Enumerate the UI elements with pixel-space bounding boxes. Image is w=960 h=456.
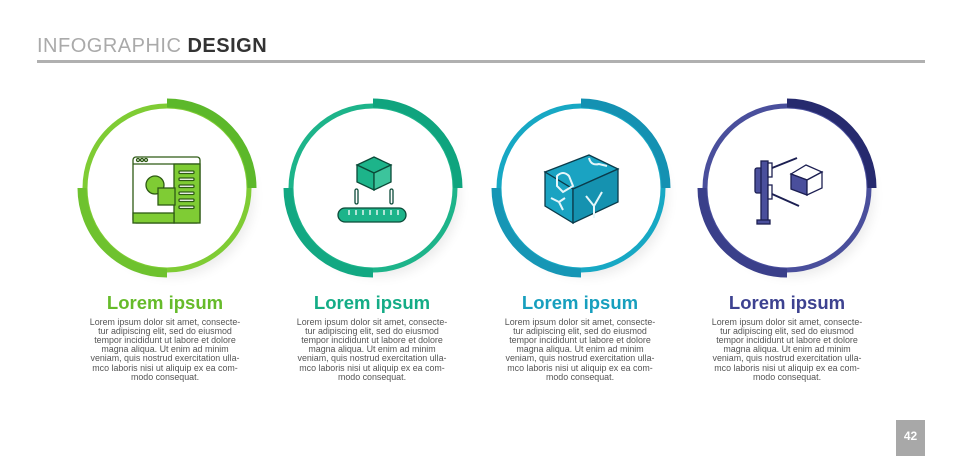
text block: step 2: modo consequat. [338,372,406,382]
text block: step 4: Lorem ipsum dolor sit amet, consecte- [712,317,862,327]
text block: step 1: Lorem ipsum dolor sit amet, consecte- [90,317,240,327]
text block: step 4: veniam, quis nostrud exercitation ulla- [713,353,862,363]
text block: step 4: tur adipiscing elit, sed do eiusmod [720,326,854,336]
text block: step 4: tempor incididunt ut labore et dolore [716,335,858,345]
text block: step 2: Lorem ipsum [314,292,430,313]
ring [496,103,666,273]
text block: step 2: tur adipiscing elit, sed do eiusmod [305,326,439,336]
icon: box over ruler [338,157,406,222]
page number: 42 [904,429,917,443]
text block: step 3: magna aliqua. Ut enim ad minim [516,344,644,354]
title: INFOGRAPHIC DESIGN [37,35,267,57]
text block: step 3: modo consequat. [546,372,614,382]
text block: step 3: mco laboris nisi ut aliquip ex ea com- [507,363,653,373]
text block: step 3: tempor incididunt ut labore et dolore [509,335,651,345]
page number [896,420,925,456]
text block: step 1: tur adipiscing elit, sed do eiusmod [98,326,232,336]
icon: browser window [133,157,200,223]
icon: scanner and box [755,158,822,224]
title [37,35,925,63]
text block: step 2 [297,292,447,382]
text block: step 3: tur adipiscing elit, sed do eiusmod [513,326,647,336]
panel: step 2 [288,103,459,276]
text block: step 1: Lorem ipsum [107,292,223,313]
text block: step 1: magna aliqua. Ut enim ad minim [101,344,229,354]
panel: step 3 [496,103,667,276]
text block: step 1: tempor incididunt ut labore et dolore [94,335,236,345]
panel: step 1 [82,103,253,276]
ring [702,103,872,273]
ring [82,103,252,273]
text block: step 1: veniam, quis nostrud exercitation ulla- [91,353,240,363]
text block: step 3 [505,292,655,382]
icon: cracked cube [545,155,618,223]
text block: step 2: Lorem ipsum dolor sit amet, consecte- [297,317,447,327]
text block: step 4 [712,292,862,382]
text block: step 3: veniam, quis nostrud exercitation ulla- [506,353,655,363]
panel: step 4 [702,103,873,276]
ring [288,103,458,273]
text block: step 4: modo consequat. [753,372,821,382]
text block: step 4: Lorem ipsum [729,292,845,313]
text block: step 4: magna aliqua. Ut enim ad minim [723,344,851,354]
text block: step 1: mco laboris nisi ut aliquip ex ea com- [92,363,238,373]
text block: step 3: Lorem ipsum [522,292,638,313]
text block: step 3: Lorem ipsum dolor sit amet, consecte- [505,317,655,327]
text block: step 4: mco laboris nisi ut aliquip ex ea com- [714,363,860,373]
text block: step 2: tempor incididunt ut labore et dolore [301,335,443,345]
text block: step 1 [90,292,240,382]
text block: step 1: modo consequat. [131,372,199,382]
text block: step 2: veniam, quis nostrud exercitation ulla- [298,353,447,363]
text block: step 2: magna aliqua. Ut enim ad minim [308,344,436,354]
text block: step 2: mco laboris nisi ut aliquip ex ea com- [299,363,445,373]
